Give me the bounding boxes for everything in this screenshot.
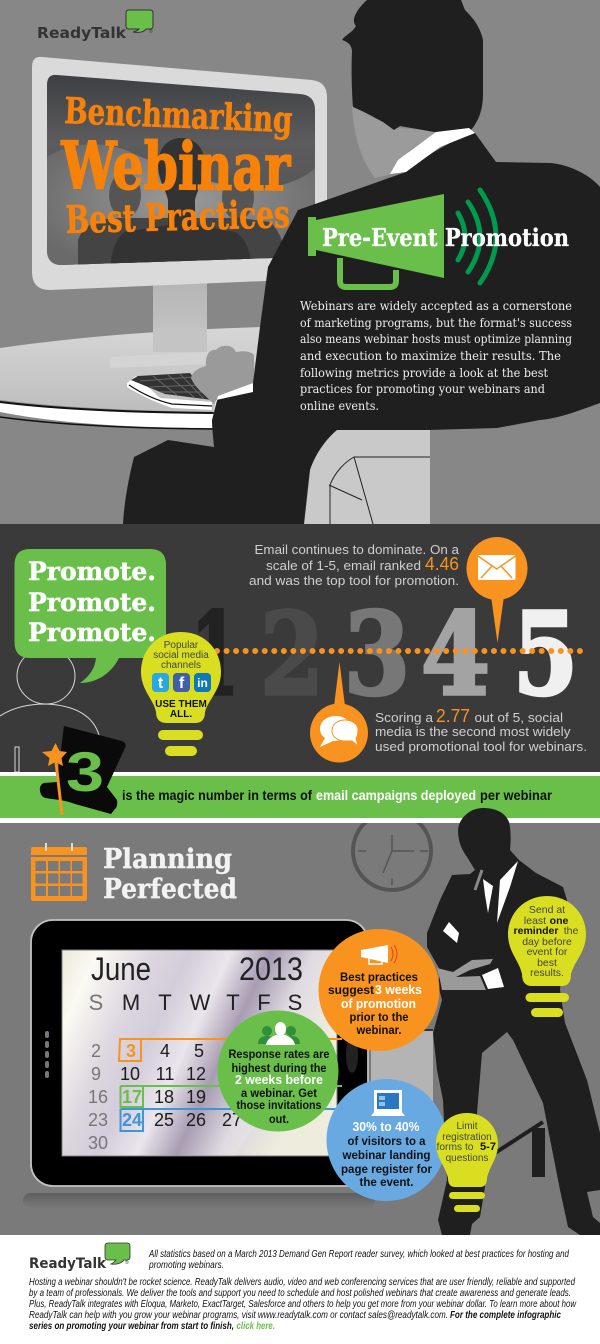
calendar screen: 27	[222, 1110, 242, 1130]
speech bubble: Promote.	[28, 588, 156, 617]
callout: email	[249, 537, 528, 643]
lightbulb: limit forms: 5-7	[480, 1141, 496, 1153]
footnote text: For the complete infographic	[450, 1310, 561, 1321]
heading: Pre-Event Promotion: Pre-Event Promotion	[322, 223, 569, 252]
callout: landing page: page register for	[341, 1164, 433, 1176]
callout: 3 weeks of promotion: prior to the	[350, 1012, 408, 1024]
calendar screen: 23	[88, 1110, 108, 1130]
callout: landing page: 30% to 40%	[352, 1120, 420, 1134]
callout: response rates: out.	[269, 1114, 289, 1126]
footnote text: promoting webinars.	[148, 1260, 224, 1271]
speech bubble: Promote.	[28, 557, 156, 586]
callout: landing page: the event.	[360, 1177, 414, 1189]
lightbulb: reminder: day before	[522, 936, 572, 948]
lightbulb: social media: channels	[161, 660, 201, 671]
icon: calendar	[31, 843, 87, 901]
calendar screen: 30	[88, 1133, 108, 1153]
calendar screen: F	[257, 990, 271, 1015]
calendar screen: M	[122, 990, 140, 1015]
tablet	[23, 920, 375, 1208]
footer logo: ®	[125, 1259, 129, 1266]
text block: intro: online events.	[300, 398, 379, 413]
logo: ReadyTalk: ReadyTalk	[37, 24, 127, 42]
lightbulb: social media: social media	[153, 650, 209, 661]
stool	[360, 1030, 545, 1177]
panel: pre-event promotion	[0, 0, 600, 524]
calendar screen: 3	[126, 1041, 136, 1061]
text block: intro: practices for promoting your webinars and	[300, 381, 545, 396]
calendar screen	[62, 950, 342, 1156]
callout: social media: out of 5, social	[474, 710, 563, 725]
lightbulb: reminder: the	[564, 925, 578, 937]
callout: landing page: of visitors to a	[348, 1136, 426, 1148]
calendar screen: 2013	[239, 951, 303, 987]
icon: wall clock	[353, 812, 431, 890]
icon: linkedin: in	[197, 676, 208, 690]
calendar screen: June	[91, 951, 151, 987]
callout: landing page: webinar landing	[341, 1150, 430, 1162]
calendar screen: 9	[91, 1064, 101, 1084]
callout: response rates: Response rates are	[228, 1049, 330, 1061]
lightbulb: reminder: reminder	[514, 925, 558, 937]
text block: intro	[300, 298, 572, 413]
panel: planning perfected	[0, 808, 600, 1235]
text: magic number: per webinar	[480, 788, 553, 803]
callout: 3 weeks of promotion: Best practices	[340, 972, 418, 984]
number scale 1-5: 2	[260, 588, 324, 721]
title: Benchmarking Webinar Best Practices	[60, 90, 293, 242]
lightbulb: limit forms: Limit	[456, 1121, 478, 1132]
lightbulb: reminder: Send at	[529, 904, 565, 916]
lightbulb: social media: USE THEM	[155, 699, 207, 710]
calendar screen: 4	[160, 1041, 170, 1061]
icon: megaphone	[308, 190, 496, 287]
calendar screen: 26	[186, 1110, 206, 1130]
text block: intro: of marketing programs, but the format's success	[300, 315, 572, 330]
calendar screen: 10	[120, 1064, 140, 1084]
lightbulb: reminder: least	[524, 915, 546, 927]
callout: response rates: those invitations	[236, 1100, 322, 1112]
footer	[0, 1235, 600, 1344]
monitor	[32, 57, 327, 352]
callout: social media: Scoring a	[375, 710, 434, 725]
calendar screen: 11	[156, 1064, 174, 1084]
callout: social media	[310, 662, 587, 762]
lightbulb: reminder: results.	[530, 967, 564, 979]
callout: 3 weeks of promotion: webinar.	[356, 1025, 402, 1037]
calendar screen: 16	[88, 1087, 108, 1107]
icon: people	[258, 1022, 300, 1045]
title: Benchmarking Webinar Best Practices: Benchmarking	[64, 90, 293, 141]
footer logo	[29, 1243, 130, 1272]
title: Benchmarking Webinar Best Practices: Best Practices	[65, 191, 290, 242]
icon: envelope	[478, 555, 516, 580]
lightbulb: reminder: one	[550, 915, 568, 927]
calendar screen: 25	[154, 1110, 174, 1130]
icon: magic hat	[40, 726, 126, 815]
calendar screen: 17	[122, 1087, 142, 1107]
logo: ReadyTalk	[37, 10, 153, 42]
speech bubble	[14, 549, 166, 683]
lightbulb: limit forms: registration	[442, 1132, 492, 1143]
footnote text: ReadyTalk can help with you grow your webinar programs, visit www.readytalk.com or contact sales@readytalk.com.	[29, 1310, 448, 1321]
text block: intro: following metrics provide a look at the best	[300, 365, 548, 380]
callout: social media: media is the second most widely	[375, 724, 571, 739]
desk	[0, 327, 262, 429]
calendar screen: T	[226, 990, 240, 1015]
text block: intro: and execution to maximize their results. The	[300, 348, 561, 363]
lightbulb: limit forms: questions	[446, 1153, 488, 1164]
text: magic number	[122, 788, 553, 803]
icon: chat bubbles	[320, 716, 358, 747]
person outline	[0, 648, 99, 772]
callout: response rates: highest during the	[232, 1063, 326, 1075]
title: Benchmarking Webinar Best Practices: Webinar	[60, 128, 291, 206]
dotted scale line	[217, 648, 584, 654]
keyboard	[127, 373, 212, 410]
icon: laptop	[371, 1090, 405, 1116]
panel: promote	[0, 524, 600, 772]
calendar screen: 18	[154, 1087, 174, 1107]
chair	[304, 430, 430, 524]
man at computer	[123, 0, 600, 524]
lightbulb: social media: Popular	[164, 640, 199, 651]
calendar screen: 24	[122, 1110, 142, 1130]
lightbulb: reminder: event for	[527, 946, 568, 958]
calendar screen: S	[288, 990, 302, 1015]
text block: intro: Webinars are widely accepted as a cornerstone	[300, 298, 572, 313]
callout: response rates: a webinar. Get	[241, 1088, 317, 1100]
number scale 1-5: 5	[513, 588, 578, 721]
callout: landing page	[326, 1079, 446, 1201]
calendar screen: S	[89, 990, 103, 1015]
number scale 1-5: 4	[421, 588, 490, 721]
calendar screen: 12	[186, 1064, 206, 1084]
footnote text: click here.	[236, 1321, 275, 1332]
calendar screen: T	[158, 990, 172, 1015]
band: magic number	[0, 726, 600, 823]
heading: Planning Perfected	[103, 844, 237, 905]
lightbulb: social media	[141, 632, 221, 756]
callout: email: 4.46	[425, 554, 459, 574]
icon: twitter: t	[158, 675, 164, 692]
lightbulb: limit forms: forms to	[436, 1142, 474, 1153]
footer logo: ReadyTalk	[29, 1256, 107, 1272]
callout: response rates	[218, 1010, 338, 1132]
text: magic number: email campaigns deployed	[316, 788, 476, 803]
number scale 1-5: 1	[191, 588, 239, 721]
callout: social media: 2.77	[436, 706, 470, 726]
callout: 3 weeks of promotion: suggest	[328, 985, 374, 997]
calendar screen: 2	[91, 1041, 101, 1061]
callout: email: Email continues to dominate. On a	[254, 542, 460, 557]
icon: magic hat: 3	[66, 740, 104, 803]
icon: facebook: f	[179, 675, 185, 692]
callout: response rates: 2 weeks before	[235, 1073, 323, 1087]
callout: 3 weeks of promotion	[318, 929, 440, 1051]
number scale 1-5	[191, 588, 578, 721]
callout: 3 weeks of promotion: 3 weeks	[375, 983, 422, 997]
icon: white megaphone	[361, 945, 397, 964]
lightbulb: reminder	[508, 896, 586, 1017]
lightbulb: social media: ALL.	[170, 709, 192, 720]
speech bubble: Promote.	[28, 618, 156, 647]
callout: email: scale of 1-5, email ranked	[266, 558, 421, 573]
calendar screen: W	[190, 990, 211, 1015]
footnote text	[29, 1249, 577, 1332]
lightbulb: limit forms	[436, 1113, 498, 1212]
heading: Planning Perfected: Planning	[103, 844, 232, 875]
lightbulb: reminder: best	[537, 957, 557, 969]
callout: 3 weeks of promotion: of promotion	[341, 997, 416, 1011]
callout: email: and was the top tool for promotion.	[249, 573, 459, 588]
calendar screen: 5	[194, 1041, 204, 1061]
footnote text: series on promoting your webinar from start to finish,	[29, 1321, 234, 1332]
text: magic number: is the magic number in terms of	[122, 788, 312, 803]
heading: Planning Perfected: Perfected	[103, 874, 237, 905]
neck	[352, 105, 440, 178]
logo: ReadyTalk: ®	[149, 28, 153, 35]
calendar screen: 19	[186, 1087, 206, 1107]
hand	[191, 346, 254, 404]
man standing	[427, 808, 600, 1235]
callout: social media: used promotional tool for webinars.	[375, 739, 587, 754]
number scale 1-5: 3	[344, 588, 410, 721]
